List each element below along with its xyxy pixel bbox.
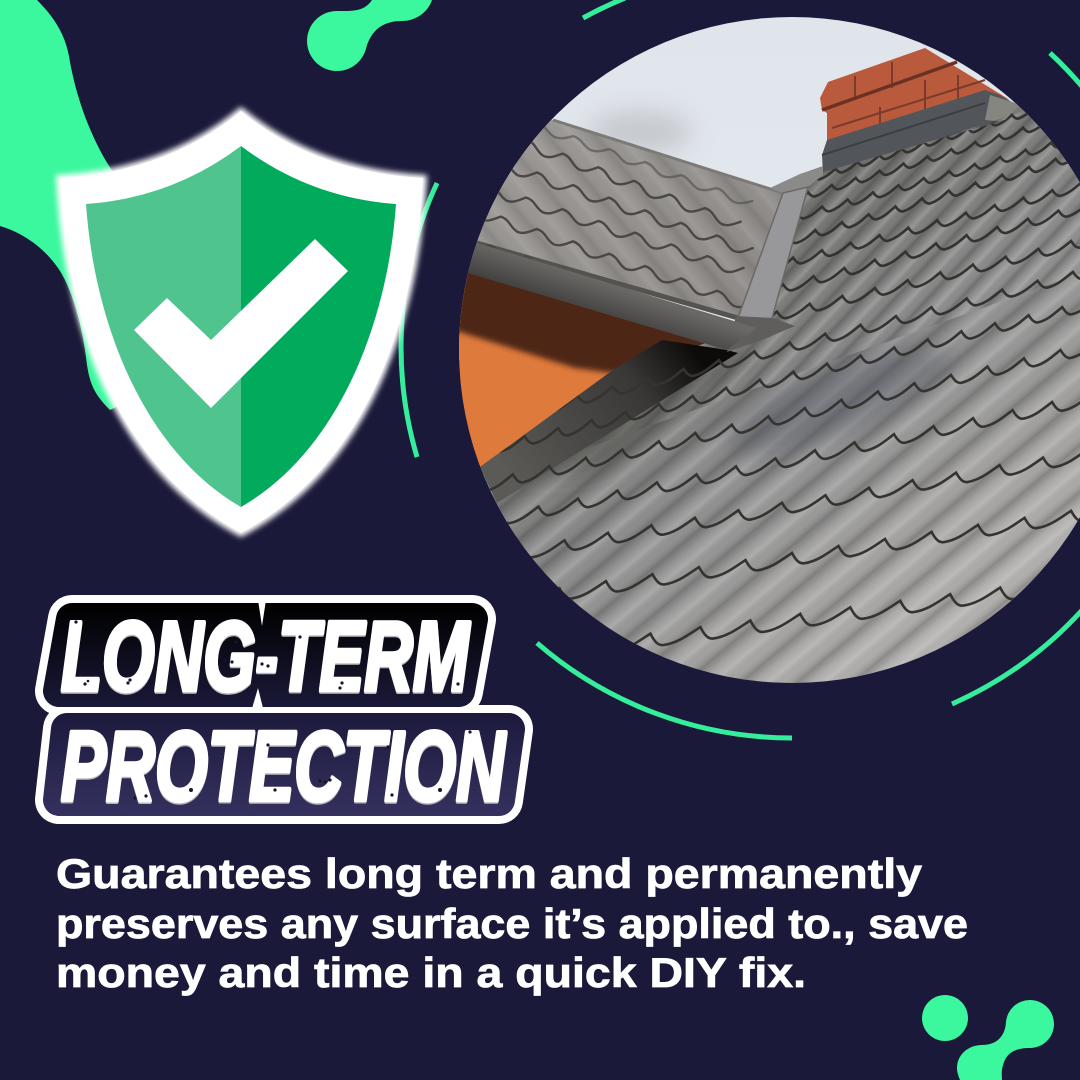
circular roof photo (459, 17, 1080, 683)
distress specks (74, 620, 472, 800)
left roof (476, 118, 782, 320)
title line one: LONG-TERM (61, 601, 471, 711)
shield right half (241, 146, 396, 507)
sky (450, 10, 1080, 360)
check mark (134, 239, 348, 408)
shield icon (57, 108, 426, 536)
shield white border (60, 111, 423, 533)
body line two: preserves any surface it’s applied to., save (56, 900, 968, 947)
body line one: Guarantees long term and permanently (56, 850, 923, 897)
decorative green blob top-left (0, 0, 150, 410)
right roof (480, 106, 1080, 683)
dark weathered streak (724, 340, 953, 462)
title line two: PROTECTION (61, 711, 507, 821)
roof ribs (483, 112, 1080, 683)
debris at valley foot (727, 316, 795, 352)
title badge (59, 600, 509, 821)
orange wall (459, 261, 705, 467)
decorative molecule bottom-right (922, 995, 1054, 1080)
badge white outline (59, 619, 509, 800)
body text (56, 850, 968, 996)
roof valley flashing (738, 187, 808, 322)
tile rows (490, 113, 1080, 646)
dark side band (480, 340, 738, 503)
ridge cap (770, 166, 823, 193)
shield left half (86, 146, 241, 507)
badge notch lower (251, 688, 264, 712)
gutter (468, 243, 756, 350)
shield glow (57, 108, 426, 536)
shaded roof edge (520, 350, 760, 480)
badge dark plate: long-term (59, 619, 472, 691)
badge dark plate: protection (59, 729, 509, 800)
decorative molecule top (307, 0, 432, 71)
chimney (820, 48, 1025, 175)
cloud (588, 110, 692, 154)
decorative arcs around photo (401, 0, 1080, 738)
body line three: money and time in a quick DIY fix. (56, 949, 806, 996)
badge notch (258, 600, 266, 626)
